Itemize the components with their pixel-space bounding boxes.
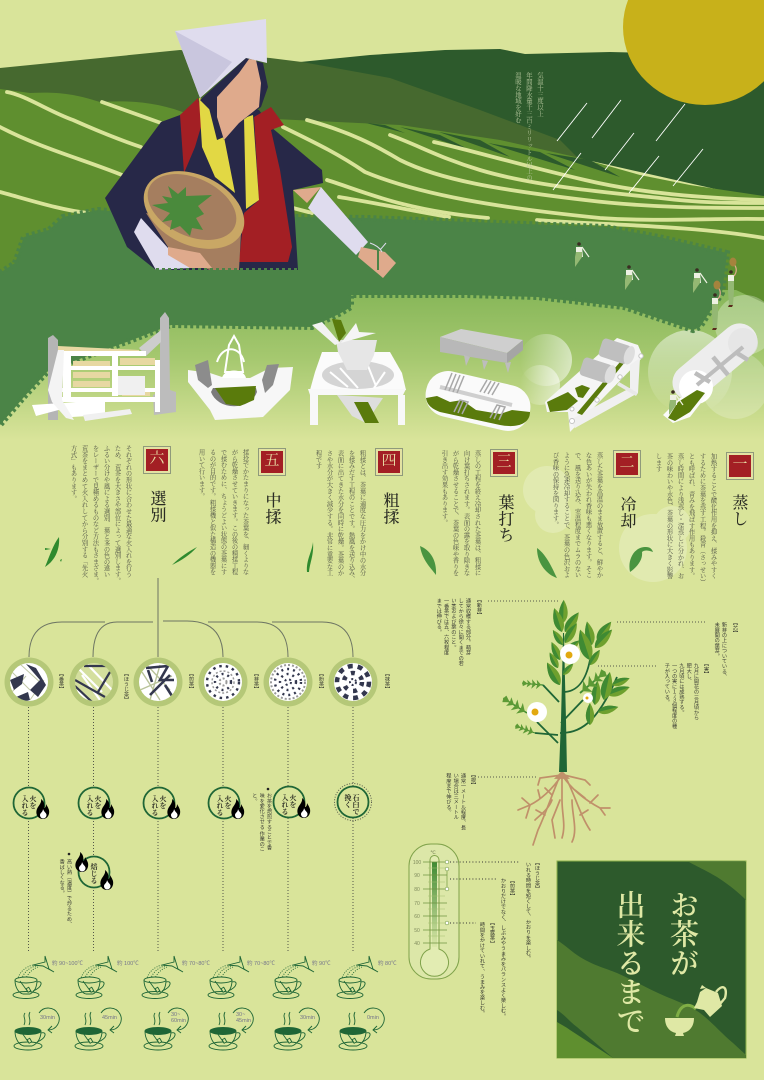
ring text 1: 入れる [21,795,29,816]
tea hedge [0,210,727,425]
plant label: 新芽: 【新芽】 [476,597,482,618]
rain lines [553,100,703,193]
text: selection: 荒茶をまとめて火入れしてから分別する「先火 [80,445,88,577]
plant text: 新芽: してから徐々に開くまでの若 [458,598,464,666]
ring text 1: 火を [29,795,37,809]
label: ほうじ茶: 【ほうじ茶】 [123,671,129,702]
ring text 6: 挽く [344,794,352,808]
machine: cooling belt [545,337,643,432]
text: selection: ため、荒茶を大きさや部位によって選別します。 [114,445,120,584]
text: cooling: び香味の保持を図ります。 [552,452,558,528]
thermometer: 60 [414,914,420,920]
text: cooling: な色あいが失われ香味も悪くなります。そこ [584,452,592,578]
text: primary rolling [314,450,366,582]
text: steaming: 茶の味わいや水色、茶葉の形状に大きく影響 [666,453,672,579]
thermometer label: ほうじ茶: 【ほうじ茶】 [534,860,540,891]
title: お茶が [666,890,698,977]
brew timers [39,1008,384,1033]
badge: 五: 五 [264,453,280,469]
process rings [14,786,368,888]
heading: 粗揉: 粗揉 [381,492,398,525]
ring text 6 [344,794,360,815]
text: cooling: で、風を送り込み、室温程度までムラのない [574,452,580,578]
tiny workers in field [575,242,736,330]
plant text: 新芽: 一番茶では五、六枚程度 [443,598,449,655]
ring text 4: 火を [224,795,232,809]
plant text: 根: 通常一メートル程度、長 [460,773,466,830]
ground gradient [0,290,764,440]
text: steaming: 蒸し時間により浅蒸し・深蒸しに分かれ、お [676,453,684,579]
badge: 二: 二 [619,455,634,471]
dotted process lines [28,707,353,952]
label: 抹茶: 【抹茶】 [384,671,390,692]
thermometer label: 玉露茶: 【玉露茶】 [489,920,495,946]
temperature and time labels: 約 90~100℃ [52,961,83,967]
plant text: 実: 子が入っている。 [664,663,670,705]
badge: 五 [258,448,286,476]
thermometer: 50 [414,928,420,934]
tea leaves beside the sections [45,537,653,578]
branching lines to tea types [29,578,353,657]
note bullets [68,788,269,855]
text: cooling: 蒸した茶葉を高温のまま放置すると、鮮やか [596,452,602,578]
ring text 1 [21,795,37,816]
plant text: 根: い場合は三メートル [453,773,459,820]
icon: teapot pouring into bowl [665,985,726,1036]
ring text 6: 石臼で [352,794,360,815]
machine: steamer drum [663,316,764,423]
thermometer text: 煎茶: かおりだけでなく、しぶみやうまみをバランスよく楽しむ。 [500,878,506,1018]
text: medium rolling: るのが目的です。粗揉機と似た構造の機器を [208,449,216,575]
temperature and time labels: 約 100℃ [117,961,139,967]
note: firing [251,793,272,852]
brewed cup row [14,1012,370,1050]
plant text: 新芽 [436,598,471,666]
plant text: 根: 程度まで伸びる。 [445,773,451,815]
thermometer [409,844,519,979]
note: roasting [59,859,72,927]
temperature and time labels: 0min [367,1015,379,1021]
climate note [514,72,544,181]
temperature and time labels: 約 80℃ [378,961,397,967]
ring text 4: 入れる [216,795,224,816]
text: selection: ふるい分けや風による選別、葉と茎の色の違い [102,445,110,577]
icon: sun [623,0,764,105]
text: medium rolling: で揉むために、ちょうどよい状態の茶葉にす [220,449,226,575]
note: firing: 味を変化させる 作業のこ [259,793,265,852]
ring text 2 [86,795,102,816]
ring text 2: 入れる [86,795,94,816]
heading: 葉打ち: 葉打ち [496,494,513,543]
ring text 5: 入れる [281,794,289,815]
thermometer text: 玉露茶: 時間をかけていれて、うまみを楽しむ。 [479,922,485,1016]
note: roasting: 香ばしくなる。 [59,859,65,895]
text: leaf beating: がら乾燥させることで、茶葉の色味や香りを [452,450,458,576]
text: primary rolling: 粗揉とは、茶葉に適度な圧力をかけ中の水分 [358,450,366,576]
light glows behind machines [520,295,764,419]
thermometer: 40 [414,941,420,947]
temperature and time labels: 30min [300,1015,315,1021]
note: roasting: 高い熱（温度）で炒るため、 [66,859,72,927]
text: medium rolling: 用いて行います。 [198,449,204,499]
thermometer: ℃ [430,850,436,856]
ring text 2: 火を [94,795,102,809]
machine: leaf beater [421,329,535,435]
badge: 六: 六 [149,451,164,467]
text: selection: 方式」もあります。 [70,445,76,502]
thermometer: 100 [413,860,421,866]
label: 番茶: 【番茶】 [58,671,64,692]
badge: 三 [490,449,518,477]
temperature and time labels: 30min [40,1015,55,1021]
plant text: 芯 [714,622,727,679]
pouring cup row [13,956,378,998]
badge: 四: 四 [381,453,396,469]
ring text 5: 火を [289,794,297,808]
plant text: 実: 九月頃には成熟する。 [678,663,684,715]
note: firing: お茶を焙煎することで香 [266,793,272,850]
text: primary rolling: を揉みだす工程のことです。熱風を送り込み、 [348,450,354,582]
badge: 一: 一 [732,457,748,473]
climate note: 年間降水量千三百ミリリットル以上の [525,72,532,181]
text: steaming [654,453,717,585]
title: 出来るまで [612,890,644,1035]
plant text: 新芽: 通常収穫する部分。萌芽 [465,598,471,655]
text: leaf beating: 蒸しの工程を終え冷却された茶葉は、粗揉に [474,450,480,576]
text: steaming: するために茶葉を蒸す工程。殺青（さっせい） [698,453,706,585]
badge: 三: 三 [496,454,512,470]
thermometer: 80 [414,887,420,893]
plant text: 根 [445,773,466,830]
text: leaf beating: 引き出す効果もあります。 [440,450,448,526]
heading: 蒸し: 蒸し [730,494,747,527]
text: cooling [552,452,603,578]
ring text: roast: 焙じる [90,863,98,884]
ring text 5 [281,794,297,815]
temperature and time labels: 45min [102,1015,117,1021]
climate note: 温暖な地域を好む [514,72,521,123]
temperature and time labels: 約 90℃ [312,961,331,967]
heading: 中揉: 中揉 [263,492,280,525]
text: leaf beating: 向け葉打ちされます。表面の露を取り除きな [462,450,470,576]
plant label: 根: 【根】 [470,772,476,788]
fire icons [36,798,310,890]
heading: 選別: 選別 [148,490,165,523]
badge: 一 [726,452,754,480]
machine: selection [32,312,176,421]
plant text: 芯: 新芽の上についている、 [721,622,727,679]
temperature and time labels: 約 70~80℃ [247,961,275,967]
machine: kneading bowl [188,336,293,420]
plant text: 実 [664,663,699,728]
stone mill dotted halo [334,784,372,820]
decorative blobs near text [523,466,691,582]
text: steaming: 加熱することで酸化作用を抑え、揉みやすく [710,453,716,579]
heading: 冷却: 冷却 [618,496,635,529]
plant text: 新芽: までは伸びる。 [436,598,442,634]
thermometer label: 煎茶: 【煎茶】 [509,878,515,899]
text: steaming: とも呼ばれ、青みを飛ばす作用もあります。 [688,453,694,579]
landscape background [0,49,764,330]
text: primary rolling: さや水分が大きく減少する。非常に重要な工 [326,450,332,576]
badge: 二 [613,450,641,478]
title panel background [557,861,746,1058]
woman right hand with sprout [358,243,396,278]
tea picker woman [105,19,368,270]
temperature and time labels: 約 70~80℃ [182,961,210,967]
plant text: 実: 肥大し、 [686,663,692,684]
text: selection [70,445,132,584]
text: medium rolling: 揉捻でかたまりになった茶葉を、細くよりな [242,449,248,575]
text: cooling: ように急速冷却することで、茶葉の色沢およ [562,452,570,578]
hedge front of woman [150,270,300,300]
plant text: 新芽: い茎および葉のこと。 [450,598,456,650]
badge: 四 [375,448,403,476]
climate note: 気温十三度以上 [536,72,543,117]
text: medium rolling [198,449,249,575]
text: primary rolling: 程です [314,450,322,469]
tea plant roots [518,772,610,845]
temperature and time labels: 30~ [236,1012,245,1018]
tea flowers [527,644,593,722]
machine: primary roller [308,319,406,425]
ring text 3: 入れる [151,795,159,816]
plant text: 実: 一つの実に１~３個程度の種 [671,663,677,728]
plant text: 芯: 未展開の葉芽。 [714,622,720,658]
plant text: 実: 九月に開花の三月頃から [693,663,699,720]
text: leaf beating [440,450,481,576]
text: selection: それぞれの形状に合わせた最適な火入れを行う [124,445,132,577]
ring text 3: 火を [159,795,167,809]
plant label: 実: 【実】 [703,661,709,677]
text: medium rolling: がら乾燥させていきます。この後の精揉工程 [230,449,238,575]
thermometer: 90 [414,873,420,879]
plant label: 芯: 【芯】 [732,620,738,636]
label: 粉茶: 【粉茶】 [318,671,324,692]
title [612,890,698,1035]
text: selection: をレーザーで見極めるものなど方法もさまざま。 [92,445,98,584]
tea plant stem and leaves [500,600,631,772]
plant label leader lines [478,601,706,777]
temperature and time labels: 60min [171,1018,186,1024]
tea sample circles [4,658,378,706]
thermometer: 70 [414,901,420,907]
text: steaming: します [654,453,662,472]
label: 芽茶: 【芽茶】 [253,671,259,692]
label: 煎茶: 【煎茶】 [188,671,194,692]
thermometer text: ほうじ茶: いれる時間を短くして、かおりを楽しむ。 [525,862,531,961]
note: firing: と。 [251,793,257,803]
temperature and time labels: 45min [236,1018,251,1024]
ring text 4 [216,795,232,816]
temperature and time labels: 30~ [171,1012,180,1018]
ring text 3 [151,795,167,816]
badge: 六 [143,446,171,474]
text: primary rolling: 表面に出てきた水分を同時に乾燥。茶葉のか [336,450,344,576]
